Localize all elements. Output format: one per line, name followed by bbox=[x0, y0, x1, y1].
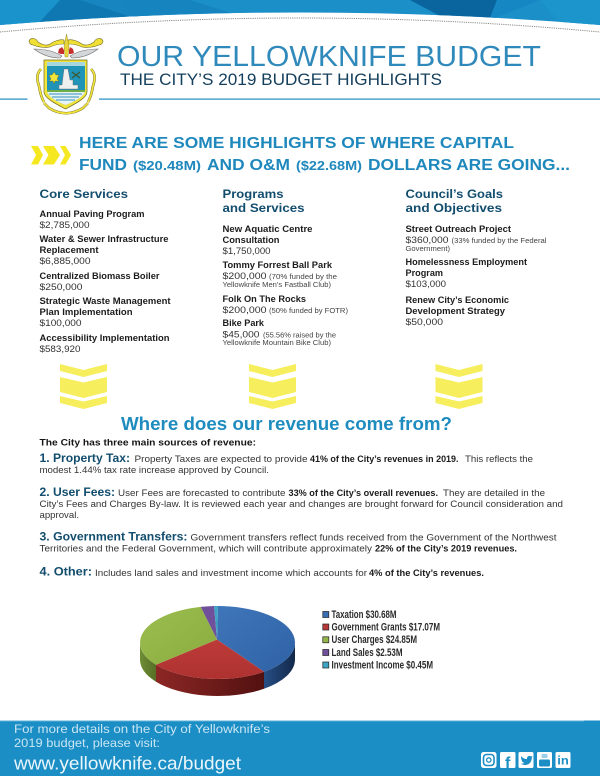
title: OUR YELLOWKNIFE BUDGET bbox=[117, 41, 541, 73]
heading: capital and O&M highlights: DOLLARS ARE GOING... bbox=[368, 157, 570, 174]
item list: programs and services: Yellowknife Mountain Bike Club) bbox=[222, 340, 331, 347]
icon: linkedin: in bbox=[557, 756, 569, 768]
legend: user charges: User Charges $24.85M bbox=[332, 634, 417, 646]
item list: council's goals: Program bbox=[406, 268, 443, 278]
header rule bbox=[0, 98, 600, 100]
text block: user fees: 33% of the City’s overall revenues. bbox=[288, 488, 438, 498]
item list: council's goals: $103,000 bbox=[406, 279, 446, 289]
item list: programs and services: (50% funded by FOTR) bbox=[269, 308, 348, 315]
subtitle: THE CITY’S 2019 BUDGET HIGHLIGHTS bbox=[120, 71, 442, 89]
icon: facebook: f bbox=[505, 755, 511, 772]
item list: council's goals: Development Strategy bbox=[406, 306, 505, 316]
item list: programs and services: New Aquatic Centre bbox=[222, 224, 312, 234]
heading: capital and O&M highlights bbox=[79, 135, 570, 174]
text block: property tax: 1. Property Tax: bbox=[40, 451, 130, 465]
text block: property tax: Property Taxes are expected to provide bbox=[134, 454, 308, 464]
text: revenue intro: The City has three main sources of revenue: bbox=[40, 438, 256, 448]
text block: other: 4% of the City’s revenues. bbox=[369, 568, 484, 578]
text block: property tax: modest 1.44% tax rate increase approved by Council. bbox=[40, 465, 269, 475]
text block: property tax: 41% of the City’s revenues in 2019. bbox=[310, 454, 458, 464]
footer text: 2019 budget, please visit: bbox=[14, 736, 160, 750]
text block: property tax: This reflects the bbox=[465, 454, 533, 464]
text block: user fees: approval. bbox=[40, 510, 79, 520]
item list: core services: Replacement bbox=[40, 245, 98, 255]
heading: programs and services: Programs bbox=[222, 187, 284, 201]
header band bbox=[0, 0, 600, 32]
legend: government grants: Government Grants $17.07M bbox=[332, 622, 440, 634]
item list: programs and services: Yellowknife Men’s Fastball Club) bbox=[222, 282, 331, 289]
item list: core services: $2,785,000 bbox=[40, 220, 90, 230]
heading: capital and O&M highlights: ($20.48M) bbox=[133, 159, 201, 173]
item list: core services: Plan Implementation bbox=[40, 307, 132, 317]
text block: other bbox=[40, 564, 484, 578]
arrow: down chevrons left bbox=[60, 364, 107, 409]
item list: council's goals: Government) bbox=[406, 246, 450, 253]
item list: council's goals: Street Outreach Project bbox=[406, 224, 511, 234]
crest shield bbox=[44, 60, 87, 109]
crest wings bbox=[34, 49, 98, 58]
heading: council's goals and objectives bbox=[406, 187, 503, 215]
item list: core services: $6,885,000 bbox=[40, 256, 90, 266]
item list: council's goals: $50,000 bbox=[406, 317, 443, 327]
item list: core services: $100,000 bbox=[40, 318, 82, 328]
text block: user fees: City’s Fees and Charges By-law. It is reviewed each year and changes are brought forward for Council consideration and bbox=[40, 499, 563, 509]
item list: council's goals: Homelessness Employment bbox=[406, 257, 527, 267]
text block: user fees: User Fees are forecasted to contribute bbox=[118, 488, 286, 498]
item list: programs and services: $45,000 bbox=[222, 330, 260, 340]
icon: instagram bbox=[481, 752, 496, 768]
item list: programs and services: $200,000 bbox=[222, 271, 266, 281]
item list: core services: $250,000 bbox=[40, 282, 82, 292]
item list: programs and services: Folk On The Rocks bbox=[222, 294, 306, 304]
item list: programs and services: (70% funded by the bbox=[269, 274, 337, 281]
heading: capital and O&M highlights: ($22.68M) bbox=[296, 159, 362, 173]
slice: government grants bbox=[156, 640, 264, 679]
item list: core services: Centralized Biomass Boiler bbox=[40, 271, 160, 281]
text block: other: 4. Other: bbox=[40, 564, 92, 578]
item list: council's goals: Renew City’s Economic bbox=[406, 295, 509, 305]
text block: government transfers: 3. Government Transfers: bbox=[40, 530, 188, 544]
legend: taxation: Taxation $30.68M bbox=[332, 609, 396, 621]
legend: investment income: Investment Income $0.45M bbox=[332, 660, 433, 672]
item list: core services bbox=[40, 209, 170, 354]
item list: core services: Annual Paving Program bbox=[40, 209, 144, 219]
text block: other: Includes land sales and investment income which accounts for bbox=[95, 568, 367, 578]
item list: programs and services: Consultation bbox=[222, 235, 280, 245]
slice: taxation bbox=[217, 606, 295, 672]
item list: core services: Accessibility Implementation bbox=[40, 333, 170, 343]
social icons bbox=[481, 752, 570, 772]
legend: land sales: Land Sales $2.53M bbox=[332, 647, 402, 659]
item list: core services: Strategic Waste Management bbox=[40, 296, 170, 306]
item list: core services: Water & Sewer Infrastructure bbox=[40, 234, 168, 244]
text block: government transfers: Government transfers reflect funds received from the Government of the Northwest bbox=[190, 532, 557, 542]
item list: programs and services: $200,000 bbox=[222, 305, 266, 315]
text block: government transfers: Territories and the Federal Government, which will contribute approximately bbox=[40, 544, 373, 554]
text block: government transfers: 22% of the City’s 2019 revenues. bbox=[375, 544, 517, 554]
heading: capital and O&M highlights: HERE ARE SOME HIGHLIGHTS OF WHERE CAPITAL bbox=[79, 135, 514, 152]
item list: council's goals bbox=[406, 224, 547, 327]
heading: core services: Core Services bbox=[40, 187, 128, 201]
pie chart bbox=[140, 606, 295, 696]
icon: twitter bbox=[518, 752, 534, 768]
footer url: www.yellowknife.ca/budget bbox=[13, 754, 241, 774]
heading: council's goals and objectives: and Objectives bbox=[406, 201, 503, 215]
crest scrolls bbox=[37, 69, 95, 113]
panel: programs and services bbox=[222, 187, 348, 347]
slice: user charges bbox=[140, 607, 217, 665]
crest banner bbox=[29, 34, 103, 57]
chart legend bbox=[323, 609, 440, 672]
arrow: down chevrons right bbox=[436, 364, 482, 409]
item list: programs and services: Bike Park bbox=[222, 318, 265, 328]
pie side wall bbox=[140, 642, 295, 696]
heading: revenue: Where does our revenue come from? bbox=[121, 413, 452, 434]
item list: core services: $583,920 bbox=[40, 344, 80, 354]
panel: core services bbox=[40, 187, 170, 354]
heading: council's goals and objectives: Council’s Goals bbox=[406, 187, 503, 201]
item list: programs and services: (55.56% raised by the bbox=[263, 332, 336, 340]
heading: programs and services: and Services bbox=[222, 201, 305, 215]
text block: user fees: 2. User Fees: bbox=[40, 485, 115, 499]
text block: user fees bbox=[40, 485, 563, 520]
slice: investment income bbox=[214, 606, 218, 640]
slice: land sales bbox=[201, 606, 217, 640]
heading: programs and services bbox=[222, 187, 305, 215]
item list: programs and services: Tommy Forrest Ball Park bbox=[222, 260, 333, 270]
icon: yellow chevrons bbox=[31, 146, 71, 164]
icon: city crest bbox=[29, 34, 103, 113]
text block: user fees: They are detailed in the bbox=[443, 488, 545, 498]
crest maple leaves bbox=[58, 47, 74, 54]
item list: programs and services: $1,750,000 bbox=[222, 246, 270, 256]
item list: programs and services bbox=[222, 224, 348, 347]
heading: capital and O&M highlights: AND O&M bbox=[207, 157, 290, 174]
heading: capital and O&M highlights: FUND bbox=[79, 157, 127, 174]
arrow: down chevrons centre bbox=[249, 364, 296, 409]
text block: government transfers bbox=[40, 530, 557, 554]
item list: council's goals: (33% funded by the Federal bbox=[452, 238, 547, 245]
text block: property tax bbox=[40, 451, 533, 475]
footer text bbox=[14, 722, 270, 750]
icon: youtube bbox=[537, 752, 552, 768]
item list: council's goals: $360,000 bbox=[406, 235, 448, 245]
panel: council's goals and objectives bbox=[406, 187, 547, 327]
footer text: For more details on the City of Yellowknife’s bbox=[14, 722, 270, 736]
footer band bbox=[0, 720, 600, 776]
